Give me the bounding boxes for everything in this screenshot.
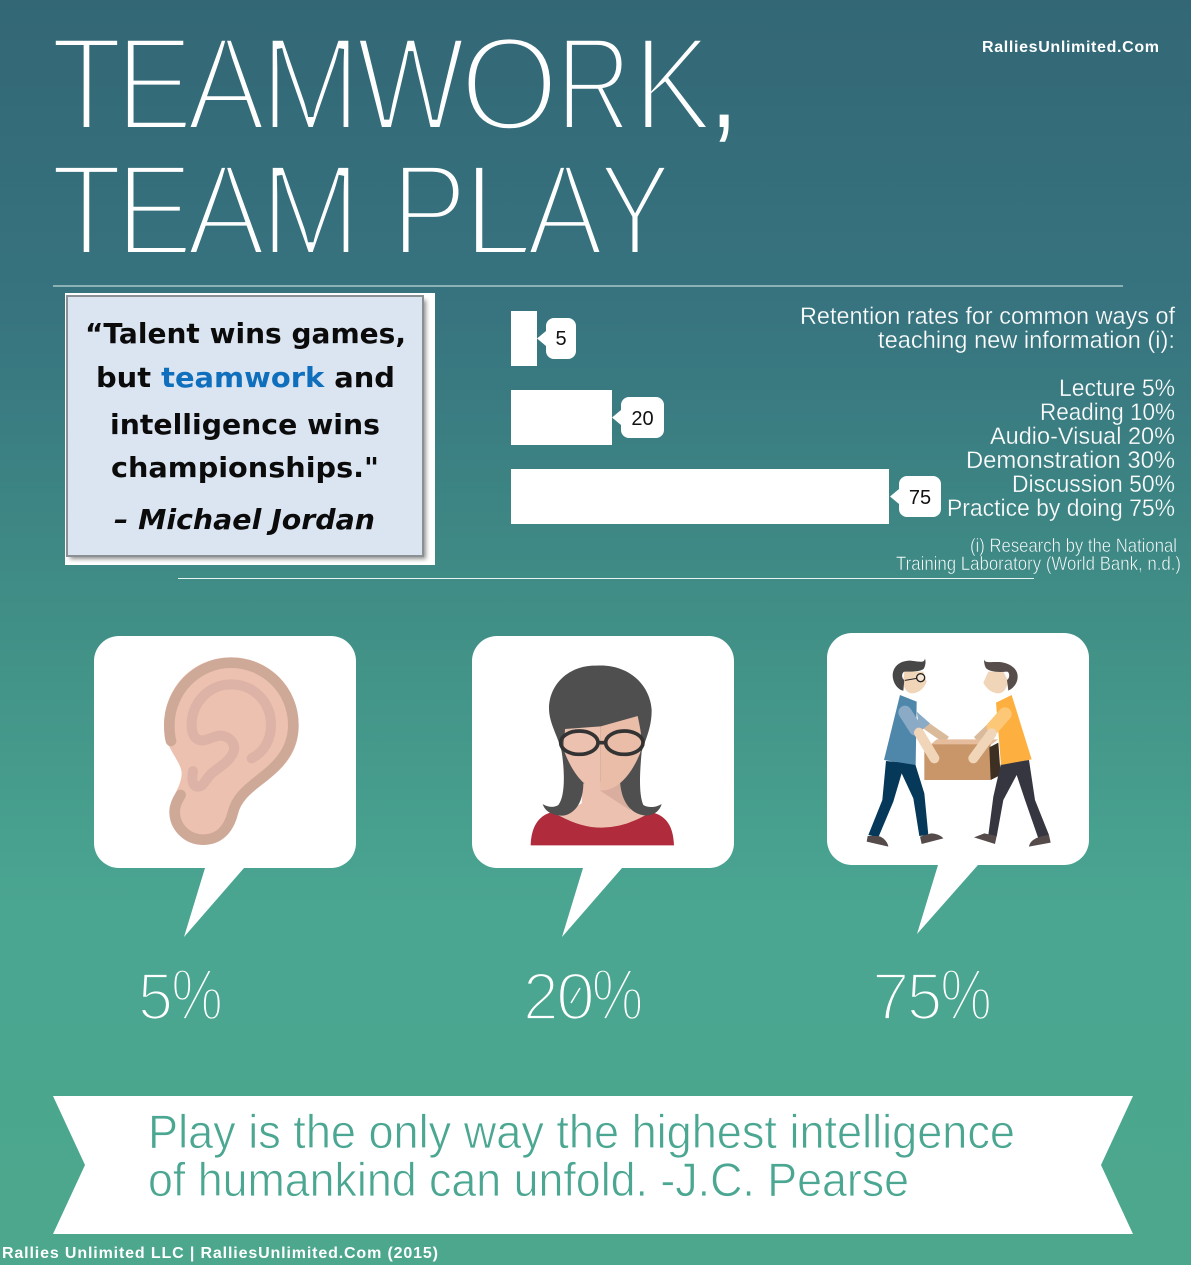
statistic: 75%: % [940, 955, 992, 1035]
statistic: 75%: 7 [872, 959, 909, 1034]
icon: ear [164, 657, 299, 845]
quote text: championships." [111, 451, 379, 484]
quote text [85, 317, 406, 536]
source footnote [896, 535, 1181, 575]
retention rates text: Practice by doing 75% [947, 495, 1175, 522]
statistic: 20%: % [592, 955, 643, 1035]
title: R [556, 10, 632, 159]
retention rates text: teaching new information (i): [878, 327, 1175, 354]
retention rates text: Audio-Visual 20% [990, 423, 1175, 450]
retention rates text: Retention rates for common ways of [800, 303, 1175, 330]
title: E [116, 10, 193, 159]
statistic: 5%: % [171, 955, 223, 1035]
title: O [460, 10, 559, 159]
title: P [391, 136, 467, 283]
title: A [526, 136, 604, 283]
title: M [260, 136, 361, 283]
website label: RalliesUnlimited.Com [982, 39, 1159, 56]
statistic: 75% [872, 955, 992, 1035]
speech bubble: two people carrying a box [827, 633, 1089, 934]
statistic: 20%: 0 [556, 959, 595, 1034]
title: K [633, 10, 713, 159]
title: E [116, 136, 193, 283]
statistic: 20%: 2 [523, 959, 558, 1034]
statistic: 75%: 5 [907, 959, 942, 1034]
bar: 20 [511, 390, 664, 445]
bar: 75 [511, 469, 941, 524]
icon: woman with glasses [531, 665, 674, 845]
bar: 20: 20 [631, 408, 654, 430]
bar chart: retention [511, 311, 941, 524]
banner: J.C. Pearse quote [53, 1096, 1133, 1234]
statistic: 20% [523, 955, 643, 1035]
retention rates text [800, 303, 1175, 522]
bar: 75: 75 [909, 487, 931, 509]
footer credit: Rallies Unlimited LLC | RalliesUnlimited.Com (2015) [2, 1245, 438, 1262]
title [50, 10, 737, 283]
panel: Michael Jordan quote [65, 293, 435, 565]
banner text: Play is the only way the highest intelligence [148, 1105, 1015, 1158]
banner text [148, 1105, 1015, 1206]
quote text: intelligence wins [110, 408, 380, 441]
banner text: of humankind can unfold. -J.C. Pearse [148, 1153, 909, 1206]
retention rates text: Lecture 5% [1059, 375, 1175, 402]
bar: 5: 5 [555, 328, 567, 350]
retention rates text: Reading 10% [1040, 399, 1175, 426]
title: T [50, 136, 122, 283]
title: A [186, 136, 266, 283]
bar: 5 [511, 311, 576, 366]
title: M [260, 10, 361, 159]
title: Y [599, 136, 672, 283]
statistic: 5% [138, 955, 223, 1035]
title: L [463, 136, 534, 283]
title: W [356, 10, 466, 159]
title: A [186, 10, 266, 159]
title: , [711, 24, 737, 152]
quote text: “Talent wins games, [85, 317, 406, 350]
quote text: but teamwork and [96, 361, 395, 394]
title: T [50, 10, 122, 159]
speech bubble: woman [472, 636, 734, 937]
statistic: 5%: 5 [138, 959, 173, 1034]
icon: people carrying box [867, 658, 1051, 847]
retention rates text: Discussion 50% [1012, 471, 1175, 498]
quote text: – Michael Jordan [114, 503, 375, 536]
speech bubble: ear [94, 636, 356, 937]
retention rates text: Demonstration 30% [966, 447, 1175, 474]
